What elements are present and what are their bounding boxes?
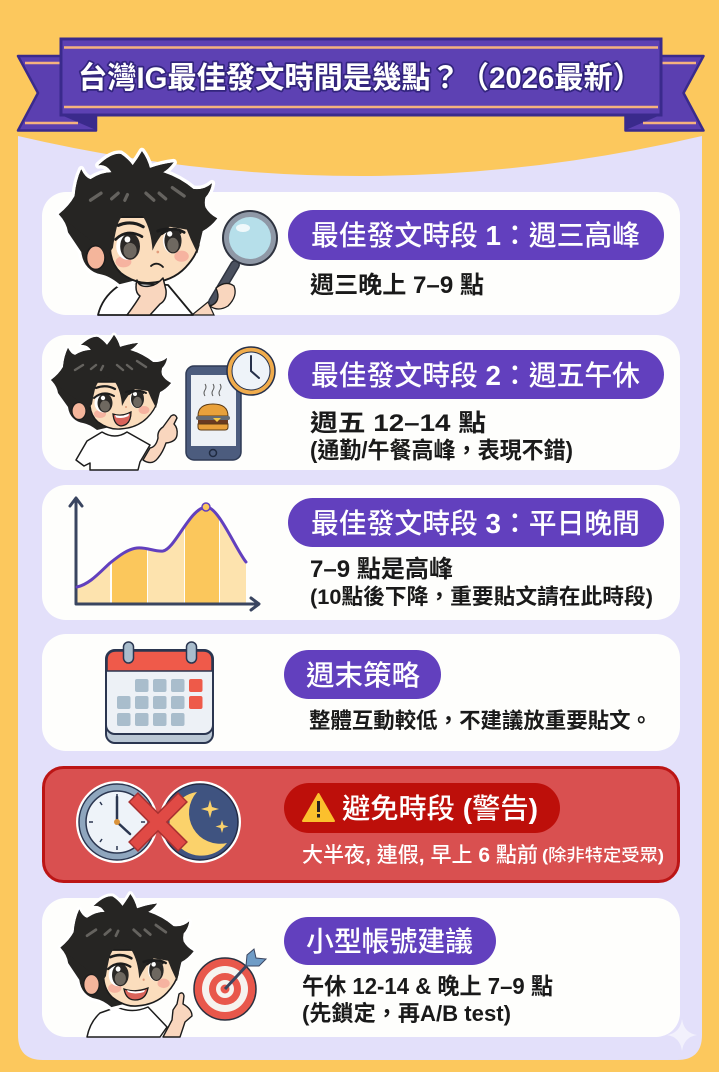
icon: clock [76, 781, 158, 863]
body text line 2: (通勤/午餐高峰，表現不錯) [310, 437, 573, 463]
ribbon right tail [626, 56, 704, 130]
title text: 台灣IG最佳發文時間是幾點？（2026最新） [78, 61, 642, 95]
pill heading [284, 650, 441, 699]
body text: 整體互動較低，不建議放重要貼文。 [309, 708, 652, 733]
icon: red cross outline [133, 797, 183, 847]
panel: time slot 3 [42, 485, 680, 620]
icon: clock [227, 347, 275, 395]
panel: weekend strategy [42, 634, 680, 751]
body text: 大半夜, 連假, 早上 6 點前 [302, 844, 538, 867]
body text line 2: (先鎖定，再A/B test) [302, 1001, 511, 1026]
card background [42, 335, 680, 470]
heading text: 避免時段 (警告) [342, 793, 538, 824]
card background [42, 634, 680, 751]
card background [42, 898, 680, 1037]
body text line 1: 7–9 點是高峰 [310, 556, 453, 583]
icon: red cross fill [134, 798, 182, 846]
heading text: 最佳發文時段 2：週五午休 [311, 360, 640, 391]
ribbon left tail [18, 56, 96, 130]
title banner [18, 39, 704, 130]
card background [44, 768, 678, 882]
icon: warning triangle [303, 794, 334, 821]
ribbon folds [61, 115, 660, 130]
area chart [70, 498, 259, 610]
heading text: 週末策略 [306, 660, 420, 691]
pill heading [288, 498, 664, 547]
band stripes [64, 48, 658, 107]
heading text: 最佳發文時段 1：週三高峰 [311, 220, 640, 251]
icon: calendar [106, 642, 213, 743]
panel: time slot 2 [42, 335, 680, 470]
character pointing [60, 894, 194, 1037]
decorative sparkle [667, 1019, 697, 1051]
icon: phone with burger [186, 366, 241, 460]
icon: moon [159, 781, 241, 863]
card background [42, 192, 680, 315]
pill heading [288, 350, 664, 399]
panel: small account advice [42, 894, 680, 1037]
ribbon main band [61, 39, 661, 115]
card background [42, 485, 680, 620]
tail stripes [25, 63, 696, 123]
icon: magnifying glass [192, 210, 278, 315]
body text: 週三晚上 7–9 點 [310, 272, 484, 299]
pill heading [288, 210, 664, 260]
heading text: 最佳發文時段 3：平日晚間 [311, 508, 640, 539]
panel: avoid times warning [44, 768, 678, 882]
pill heading [284, 783, 560, 833]
character pointing [51, 335, 177, 470]
panel: time slot 1 [42, 151, 680, 315]
heading text: 小型帳號建議 [306, 926, 473, 957]
body text line 1: 午休 12-14 & 晚上 7–9 點 [302, 973, 553, 999]
body note: (除非特定受眾 ) [542, 845, 664, 865]
character thinking [59, 151, 217, 315]
body text line 1: 週五 12–14 點 [310, 410, 486, 437]
pill heading [284, 917, 496, 965]
icon: target with arrow [194, 949, 266, 1020]
body text line 2: (10點後下降，重要貼文請在此時段) [310, 584, 653, 609]
